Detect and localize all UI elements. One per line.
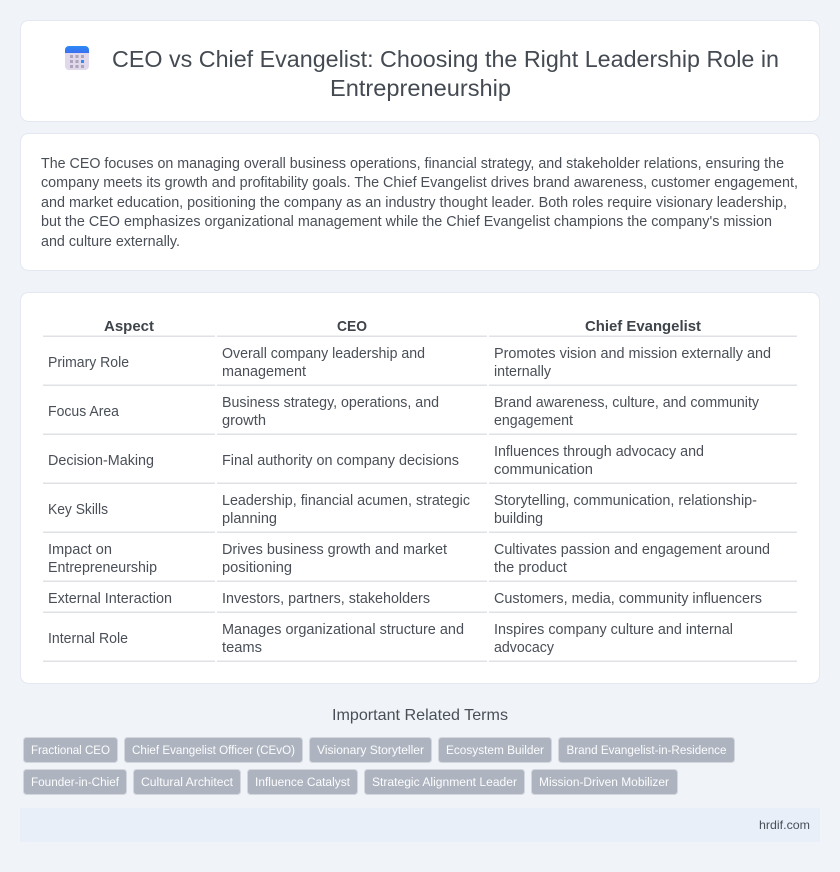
row: impact on entrepreneurship: Cultivates passion and engagement around xyxy=(494,542,770,558)
tag: Strategic Alignment Leader xyxy=(364,770,524,794)
row: impact on entrepreneurship xyxy=(48,542,770,576)
row: internal role xyxy=(48,622,733,656)
tag: Visionary Storyteller xyxy=(310,738,432,762)
row: primary role xyxy=(48,346,771,380)
table header row: Aspect xyxy=(104,319,154,335)
row: external interaction: External Interaction xyxy=(48,591,172,607)
row: impact on entrepreneurship: the product xyxy=(494,560,567,576)
row: primary role: management xyxy=(222,364,306,380)
tag: Brand Evangelist-in-Residence: Brand Evangelist-in-Residence xyxy=(566,743,727,757)
row: key skills xyxy=(48,493,757,527)
row: primary role: internally xyxy=(494,364,552,380)
row: internal role: Manages organizational structure and xyxy=(222,622,464,638)
row: internal role: Inspires company culture and internal xyxy=(494,622,733,638)
row: focus area: engagement xyxy=(494,413,573,429)
footer: hrdif.com xyxy=(759,818,810,832)
tag: Mission-Driven Mobilizer: Mission-Driven Mobilizer xyxy=(539,775,669,789)
intro paragraph: and market education, positioning the company as an industry thought leader. Both roles require visionary leadership, xyxy=(41,195,787,211)
intro paragraph: company meets its growth and profitability goals. The Chief Evangelist drives brand awareness, customer engagement, xyxy=(41,175,798,191)
row: focus area: Focus Area xyxy=(48,404,119,420)
tag: Visionary Storyteller: Visionary Storyteller xyxy=(317,743,424,757)
row: internal role: advocacy xyxy=(494,640,555,656)
tag: Brand Evangelist-in-Residence xyxy=(558,738,734,762)
tag: Strategic Alignment Leader: Strategic Alignment Leader xyxy=(372,775,517,789)
tag: Founder-in-Chief: Founder-in-Chief xyxy=(31,775,120,789)
row: decision-making: Decision-Making xyxy=(48,453,154,469)
row: decision-making: Influences through advocacy and xyxy=(494,444,704,460)
tag: Cultural Architect xyxy=(134,770,240,794)
intro paragraph: The CEO focuses on managing overall business operations, financial strategy, and stakeholder relations, ensuring the xyxy=(41,156,784,172)
panel: introduction xyxy=(20,134,820,270)
tag: Influence Catalyst xyxy=(248,770,358,794)
row: key skills: Leadership, financial acumen, strategic xyxy=(222,493,470,509)
table header row xyxy=(104,319,701,335)
panel: comparison table xyxy=(20,292,820,684)
tag: Mission-Driven Mobilizer xyxy=(532,770,678,794)
row: impact on entrepreneurship: Impact on xyxy=(48,542,112,558)
tag: Cultural Architect: Cultural Architect xyxy=(141,775,234,789)
header panel xyxy=(20,20,820,122)
footer xyxy=(20,808,820,842)
row: internal role: Internal Role xyxy=(48,631,128,647)
row: focus area: Business strategy, operations, and xyxy=(222,395,439,411)
tag: Fractional CEO: Fractional CEO xyxy=(31,743,110,757)
row: primary role: Overall company leadership and xyxy=(222,346,425,362)
related term tags xyxy=(24,738,734,794)
intro paragraph: and culture externally. xyxy=(41,234,180,250)
table header row: CEO xyxy=(337,319,367,335)
row: external interaction xyxy=(48,591,762,607)
tag: Founder-in-Chief xyxy=(24,770,126,794)
row: focus area: growth xyxy=(222,413,266,429)
row: focus area xyxy=(48,395,760,429)
row: decision-making: communication xyxy=(494,462,593,478)
row: impact on entrepreneurship: positioning xyxy=(222,560,292,576)
heading: important related terms: Important Related Terms xyxy=(332,707,508,724)
title: Entrepreneurship xyxy=(330,75,511,101)
row: primary role: Promotes vision and mission externally and xyxy=(494,346,771,362)
row: decision-making xyxy=(48,444,704,478)
row: decision-making: Final authority on company decisions xyxy=(222,453,459,469)
tag: Chief Evangelist Officer: Chief Evangelist Officer (CEvO) xyxy=(132,743,295,757)
row: key skills: Key Skills xyxy=(48,502,108,518)
tag: Fractional CEO xyxy=(24,738,118,762)
tag: Chief Evangelist Officer xyxy=(124,738,302,762)
row: impact on entrepreneurship: Drives business growth and market xyxy=(222,542,447,558)
table header row: Chief Evangelist xyxy=(585,319,701,335)
row: impact on entrepreneurship: Entrepreneurship xyxy=(48,560,157,576)
tag: Influence Catalyst: Influence Catalyst xyxy=(255,775,351,789)
tag: Ecosystem Builder: Ecosystem Builder xyxy=(446,743,544,757)
row: external interaction: Customers, media, community influencers xyxy=(494,591,762,607)
row: key skills: building xyxy=(494,511,543,527)
row: external interaction: Investors, partners, stakeholders xyxy=(222,591,430,607)
title xyxy=(112,46,779,101)
row: internal role: teams xyxy=(222,640,262,656)
row: primary role: Primary Role xyxy=(48,355,129,371)
tag: Ecosystem Builder xyxy=(438,738,552,762)
intro paragraph xyxy=(41,156,798,250)
title: CEO vs Chief Evangelist: Choosing the Right Leadership Role in xyxy=(112,46,779,72)
row: key skills: planning xyxy=(222,511,277,527)
icon: calendar xyxy=(65,46,89,70)
row: focus area: Brand awareness, culture, and community xyxy=(494,395,760,411)
intro paragraph: but the CEO emphasizes organizational management while the Chief Evangelist champions the company's mission xyxy=(41,214,772,230)
row: key skills: Storytelling, communication, relationship- xyxy=(494,493,757,509)
